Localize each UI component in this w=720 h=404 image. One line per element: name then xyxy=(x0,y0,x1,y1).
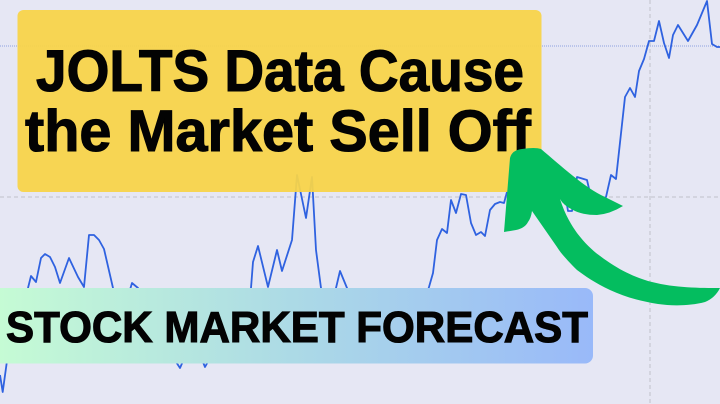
banner text: STOCK MARKET FORECAST xyxy=(6,303,588,352)
headline text line 2: the Market Sell Off xyxy=(25,99,532,164)
arrow: green curved arrow pointing at headline xyxy=(504,148,720,305)
stock market forecast banner xyxy=(0,288,593,364)
headline text line 1: JOLTS Data Cause xyxy=(36,39,524,104)
